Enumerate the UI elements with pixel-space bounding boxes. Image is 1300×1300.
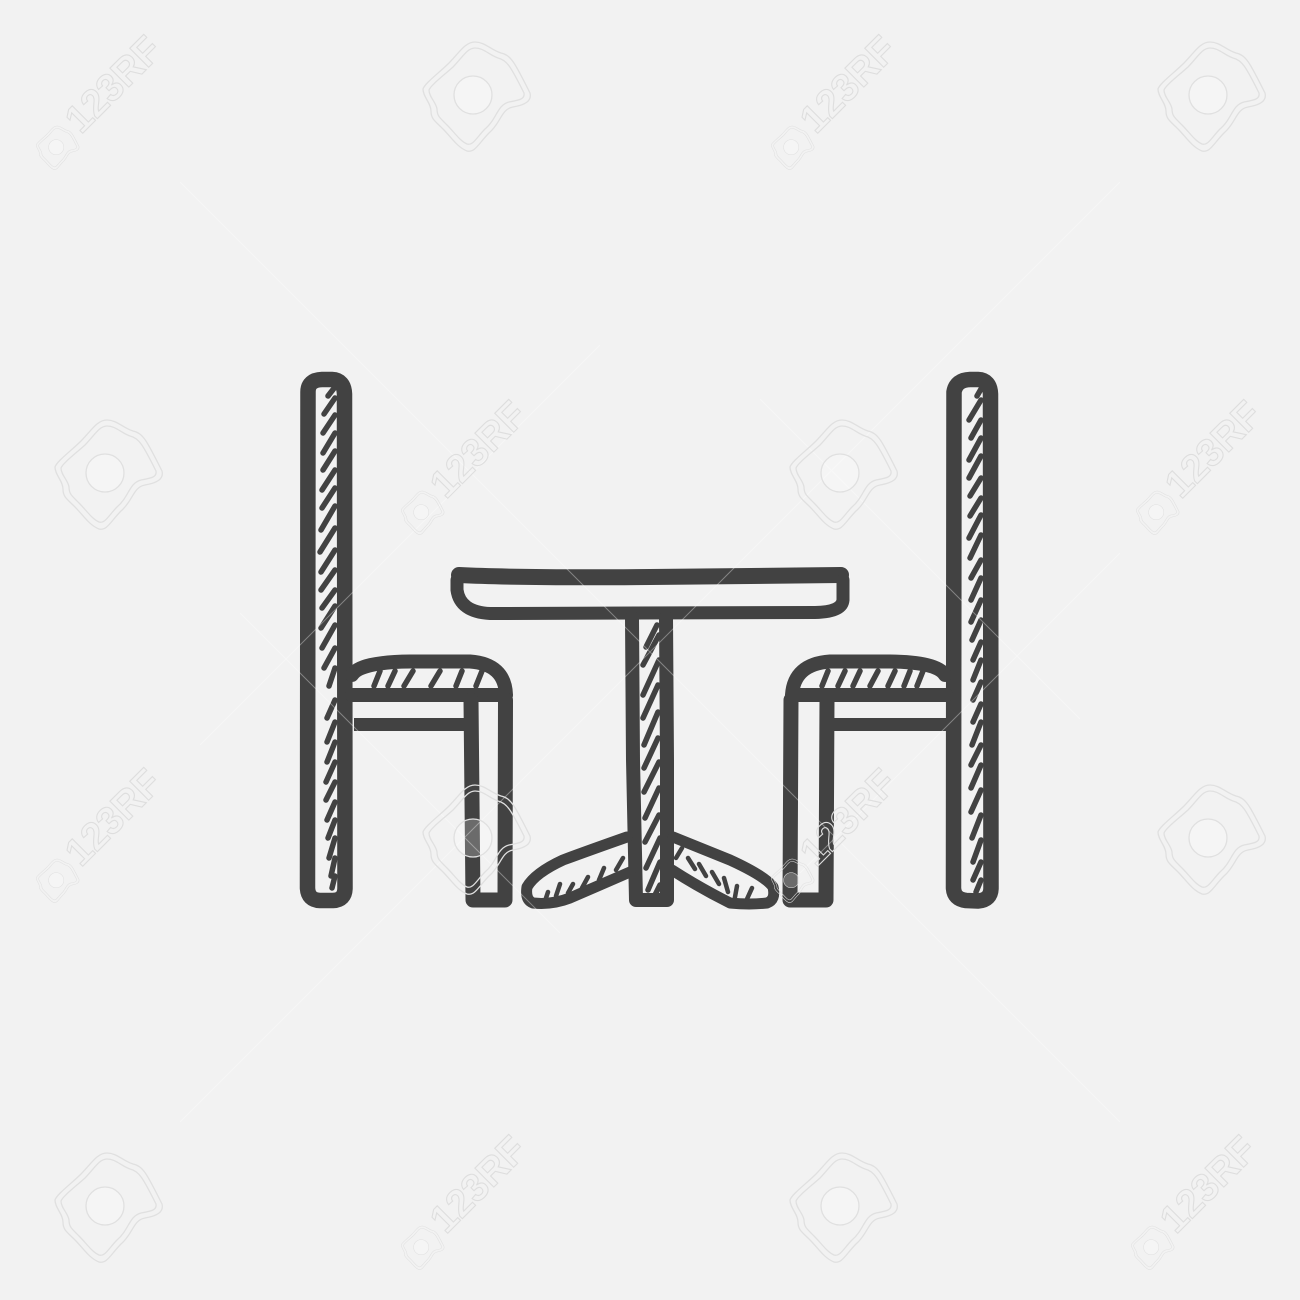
egg mark 3	[55, 420, 162, 529]
left chair seat	[352, 662, 506, 695]
watermark 7: 123RF	[422, 1128, 535, 1241]
left chair rail	[354, 718, 465, 731]
watermark 2	[771, 28, 905, 170]
watermark 3: 123RF	[422, 393, 535, 506]
watermark 8: 123RF	[1152, 1128, 1265, 1241]
watermark 6	[771, 761, 905, 903]
watermark 1	[36, 28, 170, 170]
watermark 8	[1131, 1128, 1265, 1270]
egg mark 8	[790, 1153, 897, 1262]
right chair back	[954, 380, 991, 901]
watermark 4	[1136, 393, 1270, 535]
egg mark 6	[1158, 785, 1265, 894]
left chair back	[308, 380, 345, 900]
watermark 1: 123RF	[57, 28, 170, 141]
table top lower edge	[457, 580, 843, 614]
watermark 3	[401, 393, 535, 535]
egg mark 5	[423, 785, 530, 894]
table pedestal hatching	[643, 625, 660, 895]
egg mark 7	[55, 1153, 162, 1262]
watermark 5: 123RF	[57, 761, 170, 874]
left table foot	[527, 837, 630, 903]
right chair front leg	[790, 700, 827, 900]
right chair rail	[834, 718, 946, 731]
right chair back hatching	[969, 389, 981, 892]
right chair seat	[792, 662, 946, 695]
left chair front leg	[471, 700, 506, 900]
watermark 4: 123RF	[1157, 393, 1270, 506]
faint diagonal seams	[180, 182, 1120, 1122]
right foot hatching	[676, 848, 752, 899]
egg mark 2	[1158, 42, 1265, 151]
right chair seat hatching	[822, 671, 923, 686]
left chair back hatching	[320, 387, 335, 888]
egg mark 4	[790, 420, 897, 529]
left chair seat hatching	[374, 671, 482, 686]
watermark 7	[401, 1128, 535, 1270]
left foot hatching	[546, 858, 623, 898]
right chair	[790, 380, 991, 901]
watermark 5	[36, 761, 170, 903]
watermark 6: 123RF	[792, 761, 905, 874]
table top	[459, 575, 841, 577]
watermark 2: 123RF	[792, 28, 905, 141]
left chair	[308, 380, 506, 900]
table pedestal	[632, 618, 667, 900]
egg mark 1	[423, 42, 530, 151]
table	[457, 575, 843, 904]
right table foot	[672, 837, 774, 904]
